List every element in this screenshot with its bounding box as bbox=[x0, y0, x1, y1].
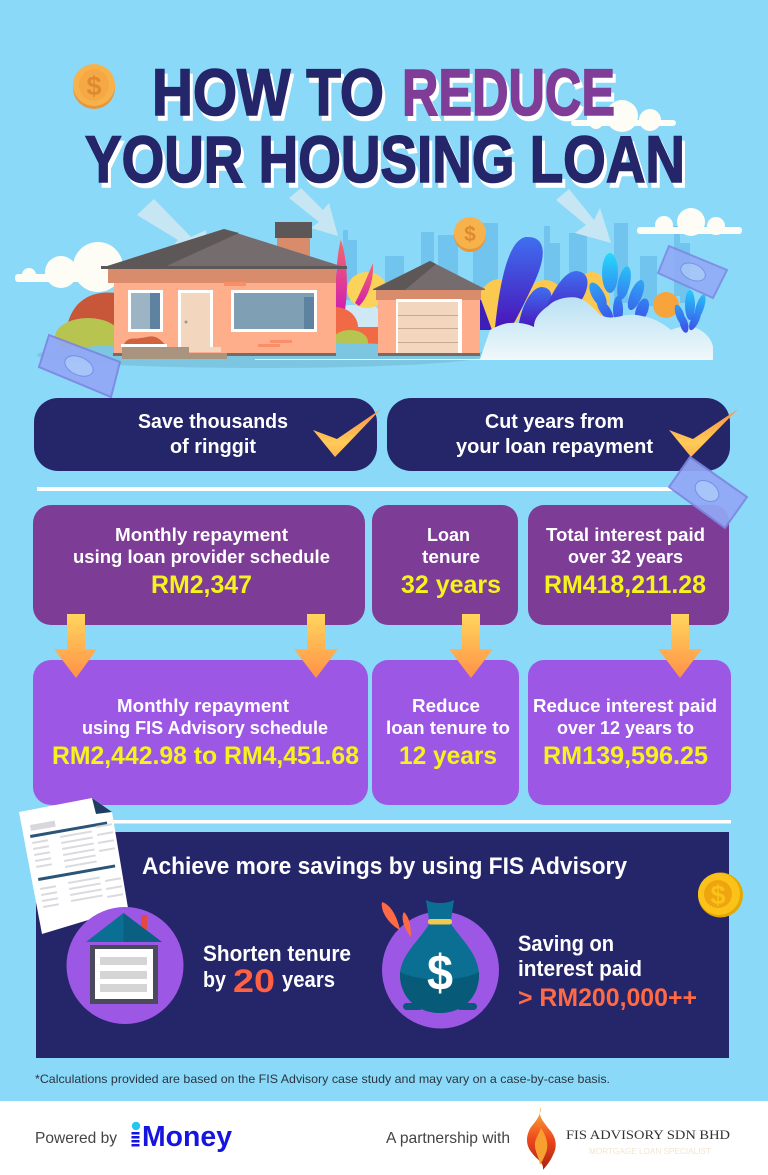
panel: reduce tenure: loan tenure to bbox=[386, 718, 510, 738]
icon: money bag in circle bbox=[382, 900, 499, 1028]
panel: reduce tenure: Reduce bbox=[412, 696, 480, 716]
cloud left bbox=[15, 242, 125, 292]
large foreground cloud bbox=[255, 297, 713, 360]
panel: reduce tenure: 12 years bbox=[399, 742, 497, 770]
logo: iMoney: Money bbox=[142, 1121, 232, 1153]
icon: banknote top right bbox=[658, 246, 727, 298]
icon: check mark bbox=[313, 409, 381, 457]
panel: reduce interest: Reduce interest paid bbox=[533, 696, 717, 716]
panel: monthly repayment FIS: using FIS Advisory schedule bbox=[82, 718, 328, 738]
text: saving on interest bbox=[518, 931, 697, 1012]
panel: cut years: Cut years from bbox=[485, 411, 624, 433]
title: REDUCE bbox=[402, 55, 615, 129]
ground shadow bbox=[37, 342, 487, 368]
panel: achieve more savings bbox=[19, 798, 729, 1058]
plants bbox=[478, 237, 679, 331]
arrow: interest bbox=[658, 614, 702, 678]
text: shorten tenure: by bbox=[203, 967, 227, 992]
partnership: A partnership with bbox=[386, 1130, 510, 1147]
panel: monthly repayment FIS bbox=[33, 660, 368, 805]
panel: monthly repayment loan provider: RM2,347 bbox=[151, 571, 252, 599]
icon: coin middle bbox=[454, 217, 486, 252]
panel: loan tenure: Loan bbox=[427, 525, 470, 545]
panel: reduce tenure bbox=[372, 660, 519, 805]
city skyline bbox=[343, 223, 690, 306]
powered by: Powered by bbox=[35, 1130, 117, 1147]
panel: total interest: over 32 years bbox=[568, 547, 683, 567]
cloud behind title bbox=[571, 100, 676, 132]
house bbox=[101, 222, 347, 359]
icon: gold coin right: $ bbox=[710, 880, 726, 910]
panel: reduce interest: over 12 years to bbox=[557, 718, 694, 738]
translucent arrows bbox=[137, 188, 611, 262]
icon: banknote middle right bbox=[669, 457, 747, 528]
icon: money bag in circle: $ bbox=[427, 945, 453, 1001]
heading: Achieve more savings by using FIS Advisory bbox=[142, 853, 628, 880]
title: REDUCE bbox=[405, 60, 618, 134]
footnote: *Calculations provided are based on the FIS Advisory case study and may vary on a case-by-case basis. bbox=[35, 1072, 610, 1086]
text: shorten tenure: Shorten tenure bbox=[203, 941, 351, 966]
panel: save thousands: Save thousands bbox=[138, 411, 288, 433]
panel: cut years bbox=[387, 398, 738, 471]
cloud right bbox=[637, 208, 742, 236]
bushes bbox=[55, 240, 387, 356]
icon: coin middle: $ bbox=[464, 223, 476, 246]
panel: reduce interest bbox=[528, 660, 731, 805]
panel: monthly repayment loan provider: using loan provider schedule bbox=[73, 547, 330, 567]
arrow: monthly left bbox=[54, 614, 97, 678]
panel: total interest: Total interest paid bbox=[546, 525, 705, 545]
logo text: FIS Advisory bbox=[566, 1127, 730, 1156]
footer bbox=[0, 1101, 768, 1175]
logo text: FIS Advisory: FIS ADVISORY SDN BHD bbox=[566, 1127, 730, 1142]
text: saving on interest: Saving on bbox=[518, 931, 614, 956]
text: saving on interest: > RM200,000++ bbox=[518, 984, 697, 1012]
arrow: tenure bbox=[449, 614, 493, 678]
panel: total interest bbox=[528, 505, 729, 625]
icon: gold coin right bbox=[698, 872, 743, 918]
panel: monthly repayment FIS: RM2,442.98 to RM4,451.68 bbox=[52, 742, 359, 770]
panel: monthly repayment FIS: Monthly repayment bbox=[117, 696, 289, 716]
title: HOW TO bbox=[152, 55, 384, 129]
icon: banknote bottom left bbox=[39, 335, 120, 397]
text: shorten tenure: 20 bbox=[233, 963, 275, 999]
logo: flame bbox=[527, 1107, 556, 1170]
panel: loan tenure: 32 years bbox=[401, 571, 501, 599]
arrow: monthly right bbox=[294, 614, 338, 678]
icon: coin top left: $ bbox=[86, 71, 102, 101]
panel: reduce interest: RM139,596.25 bbox=[543, 742, 708, 770]
icon: check mark bbox=[669, 409, 738, 457]
text: shorten tenure: years bbox=[282, 967, 335, 992]
panel: total interest: RM418,211.28 bbox=[544, 571, 706, 599]
panel: cut years: your loan repayment bbox=[456, 436, 653, 458]
illustration: house scene bbox=[15, 188, 742, 368]
text: shorten tenure bbox=[203, 941, 351, 999]
panel: monthly repayment loan provider bbox=[33, 505, 365, 625]
panel: save thousands bbox=[34, 398, 381, 471]
panel: loan tenure: tenure bbox=[422, 547, 480, 567]
panel: save thousands: of ringgit bbox=[170, 436, 256, 458]
text: saving on interest: interest paid bbox=[518, 956, 642, 981]
icon: house in circle bbox=[66, 907, 184, 1024]
icon: coin top left bbox=[73, 64, 115, 109]
panel: loan tenure bbox=[372, 505, 518, 625]
panel: monthly repayment loan provider: Monthly repayment bbox=[115, 525, 288, 545]
title bbox=[85, 55, 688, 201]
logo text: FIS Advisory: MORTGAGE LOAN SPECIALIST bbox=[589, 1146, 711, 1156]
small fern bbox=[672, 290, 708, 334]
garage bbox=[373, 261, 485, 356]
title: HOW TO bbox=[155, 60, 387, 134]
icon: document bbox=[19, 798, 128, 934]
